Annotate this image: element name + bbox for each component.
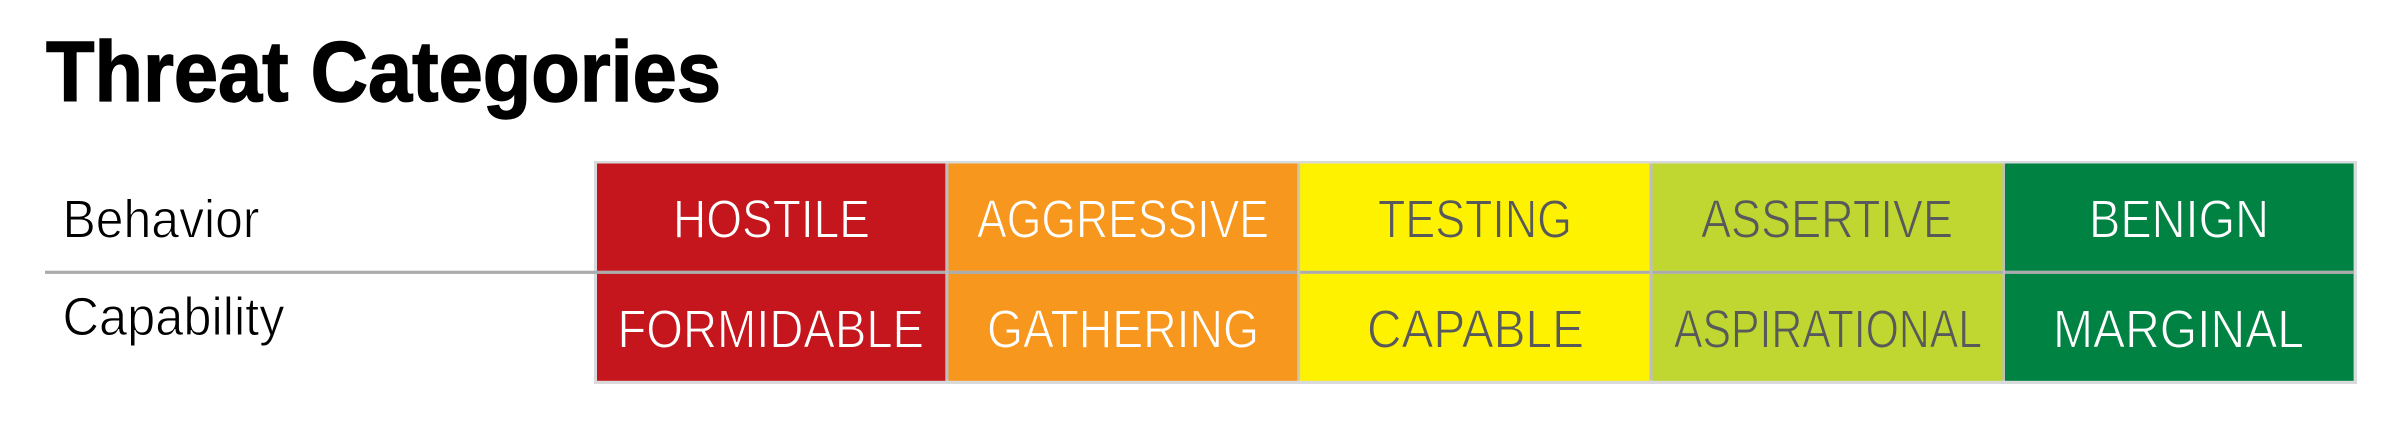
column: hostile / formidable (red) bbox=[597, 164, 945, 381]
column: assertive / aspirational (lime) bbox=[1652, 164, 2002, 381]
column: benign / marginal (green): BENIGN bbox=[2089, 190, 2269, 250]
column: aggressive / gathering (orange): GATHERING bbox=[987, 300, 1259, 360]
row label: Capability: Capability bbox=[62, 287, 284, 347]
title: Threat Categories bbox=[46, 25, 721, 120]
column: aggressive / gathering (orange): AGGRESSIVE bbox=[977, 190, 1269, 250]
column: testing / capable (yellow) bbox=[1300, 164, 1650, 381]
column: assertive / aspirational (lime): ASSERTIVE bbox=[1701, 190, 1953, 250]
column: benign / marginal (green) bbox=[2005, 164, 2354, 381]
column: testing / capable (yellow): TESTING bbox=[1378, 190, 1572, 250]
column: hostile / formidable (red): FORMIDABLE bbox=[618, 300, 924, 360]
column: hostile / formidable (red): HOSTILE bbox=[673, 190, 870, 250]
column: testing / capable (yellow): CAPABLE bbox=[1367, 300, 1584, 360]
column: assertive / aspirational (lime): ASPIRATIONAL bbox=[1674, 300, 1982, 360]
threat category table bbox=[45, 161, 2357, 384]
row label: Behavior: Behavior bbox=[62, 190, 260, 250]
column: benign / marginal (green): MARGINAL bbox=[2053, 300, 2304, 360]
column: aggressive / gathering (orange) bbox=[948, 164, 1297, 381]
